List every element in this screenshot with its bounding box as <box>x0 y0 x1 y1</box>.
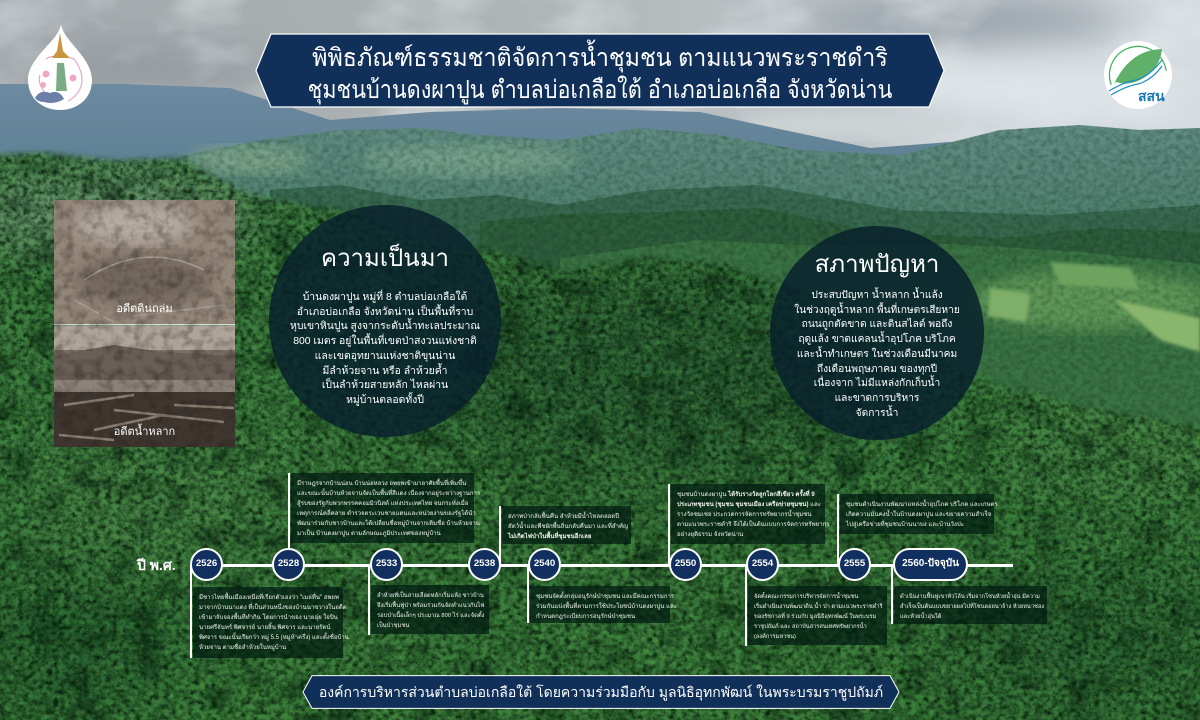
node 2540 <box>528 548 561 581</box>
node 2526: 2526 <box>196 558 217 569</box>
node pill 2560: 2560-ปัจจุบัน <box>902 558 959 569</box>
text: history body: อำเภอบ่อเกลือ จังหวัดน่าน เป็นพื้นที่ราบ <box>297 307 473 318</box>
heading: history: ความเป็นมา <box>321 245 449 272</box>
event 2560: สำเร็จเป็นต้นแบบขยายผลไปที่โซนดอยนาจ้าง ห้วยหนาช่อง <box>900 604 1044 610</box>
event 2550: อย่างยุติธรรม จังหวัดน่าน <box>677 532 743 538</box>
event 2533: รอบป่าเนื้อเล็กๆ ประมาณ 800 ไร่ และจัดตั้ง <box>377 613 484 619</box>
timeline label: ปี พ.ศ. <box>137 557 176 573</box>
timeline axis <box>190 564 1013 566</box>
panel: problems circle <box>770 226 984 440</box>
node 2533: 2533 <box>376 558 397 569</box>
event 2528 <box>288 473 480 548</box>
event 2528: มีราษฎรจากบ้านน่อน บ้านน่อหลวง อพยพเข้ามาอาศัยพื้นที่เพิ่มขึ้น <box>297 481 466 487</box>
event 2555: ชุมชนดำเนินงานพัฒนาแหล่งน้ำอุปโภค บริโภค และเกษตร <box>846 502 998 508</box>
node 2554 <box>746 548 779 581</box>
text: history body: หมู่บ้านตลอดทั้งปี <box>346 395 424 406</box>
text: history body: บ้านดงผาปูน หมู่ที่ 8 ตำบลบ่อเกลือใต้ <box>303 292 467 303</box>
text: history body <box>290 290 480 406</box>
node pill 2560 <box>893 548 968 581</box>
logo: สสน agency emblem: สสน <box>1138 88 1165 104</box>
event 2554: (องค์การมหาชน) <box>754 634 796 640</box>
event 2533: ลำห้วยที่เป็นสายเลือดหลักเริ่มแห้ง ชาวบ้าน <box>377 593 484 599</box>
text: problems body: ถนนถูกตัดขาด และดินสไลด์ พอถึง <box>802 319 952 330</box>
event 2526: มีชาวไทยพื้นเมืองเหนือที่เรียกตัวเองว่า "เมล่ทื่น" อพยพ <box>199 595 339 601</box>
node 2533 <box>370 548 403 581</box>
event 2528: เหตุการณ์คลี่คลาย ตำรวจตระเวนชายแดนและหน่วยงานของรัฐได้นำ <box>297 511 476 517</box>
logo: สสน agency emblem <box>1104 41 1172 109</box>
event 2550: ชุมชนบ้านดงผาปูน ได้รับรางวัลลูกโลกสีเขียว ครั้งที่ 9 <box>677 492 815 498</box>
event 2550: ตามแนวพระราชดำริ จึงได้เป็นต้นแบบการจัดการทรัพยากร <box>677 522 830 528</box>
footer banner <box>302 675 900 709</box>
title banner <box>255 33 944 108</box>
event 2554: จัดตั้งคณะกรรมการบริหารจัดการน้ำชุมชน <box>754 594 858 600</box>
event 2538 <box>499 506 631 564</box>
event 2528: สู้รบของรัฐกับพวกพรรคคอมมิวนิสต์ แห่งประเทศไทย จนกระทั่งเมื่อ <box>297 501 468 507</box>
caption: flash flood: อดีตน้ำหลาก <box>114 426 175 438</box>
event 2554: ของรัชกาลที่ 9 ร่วมกับ มูลนิธิอุทกพัฒน์ ในพระบรม <box>754 614 876 620</box>
event 2528: มาเป็น บ้านดงผาปูน ตามลักษณะภูมิประเทศของหมู่บ้าน <box>297 531 441 537</box>
text: problems body: จัดการน้ำ <box>856 408 898 419</box>
logo: water drop museum emblem <box>28 24 92 110</box>
event 2540: ชุมชนจัดตั้งกลุ่มอนุรักษ์ป่าชุมชน และมีคณะกรรมการ <box>536 594 674 600</box>
text: problems body: และน้ำทำเกษตร ในช่วงเดือนมีนาคม <box>797 349 957 360</box>
event 2528: พัฒนาร่วมกับชาวบ้านและได้เปลี่ยนชื่อหมู่บ้านจากเดิมชื่อ บ้านห้วยจาน <box>297 521 480 527</box>
event 2540: ร่วมกันแบ่งพื้นที่ตามการใช้ประโยชน์บ้านดงผาปูน และ <box>536 604 677 610</box>
text: problems body: ถึงเดือนพฤษภาคม ของทุกปี <box>817 364 937 375</box>
event 2555 <box>837 494 998 564</box>
event 2533 <box>368 567 489 635</box>
node 2528: 2528 <box>278 558 299 569</box>
event 2554: เริ่มดำเนินงานพัฒนาดิน น้ำ ป่า ตามแนวพระราชดำริ <box>754 604 883 610</box>
event 2560: และห้วยน้ำอุ่นใต้ <box>900 614 941 620</box>
title banner: พิพิธภัณฑ์ธรรมชาติจัดการน้ำชุมชน ตามแนวพระราชดำริ <box>312 44 888 72</box>
event 2560 <box>891 567 1047 624</box>
event 2554 <box>745 567 887 646</box>
node 2540: 2540 <box>534 558 555 569</box>
event 2526: ห้วยจาน ตามชื่อลำห้วยในหมู่บ้าน <box>199 645 286 651</box>
text: history body: และเขตอุทยานแห่งชาติขุนน่าน <box>315 351 455 362</box>
panel: history circle <box>269 205 501 437</box>
event 2526: มาจากบ้านนาแดง ที่เป็นส่วนหนึ่งของบ้านนาขวางในอดีต <box>199 605 347 611</box>
event 2555: ไปสู่เครือข่ายที่ชุมชนบ้านนาบง และบ้านวังปะ <box>846 522 964 528</box>
event 2560: ดำเนินงานฟื้นฟูเขาหัวโล้น เริ่มจากโซนห้วยน้ำอุ่น มีความ <box>900 594 1040 600</box>
event 2526 <box>190 567 349 658</box>
event 2550: รางวัลชมเชย ประกวดการจัดการทรัพยากรน้ำชุมชน <box>677 512 812 518</box>
event 2528: และขณะนั้นบ้านห้วยจานจัดเป็นพื้นที่สีแดง เนื่องจากอยู่ระหว่างฐานการ <box>297 491 480 497</box>
event 2554: ราชูปถัมภ์ และ สถาบันสารสนเทศทรัพยากรน้ำ <box>754 624 867 630</box>
title banner: ชุมชนบ้านดงผาปูน ตำบลบ่อเกลือใต้ อำเภอบ่อเกลือ จังหวัดน่าน <box>308 76 892 104</box>
node 2538: 2538 <box>474 558 495 569</box>
event 2526: นายศรีจันทร์ พิศจารย์ นายสิ้น พิศจาร และนายรัตน์ <box>199 625 330 631</box>
text: problems body: เนื่องจาก ไม่มีแหล่งกักเก็บน้ำ <box>814 378 940 389</box>
event 2533: จึงเริ่มฟื้นฟูป่า พร้อมร่วมกันจัดทำแนวกันไฟ <box>377 603 484 609</box>
event 2540 <box>527 567 677 623</box>
text: problems body: ฤดูแล้ง ขาดแคลนน้ำอุปโภค บริโภค <box>798 334 956 345</box>
caption: landslide: อดีตดินถล่ม <box>116 303 173 315</box>
event 2533: เป็นป่าชุมชน <box>377 623 409 629</box>
event 2540: กำหนดกฎระเบียบการอนุรักษ์ป่าชุมชน <box>536 614 635 620</box>
footer banner: องค์การบริหารส่วนตำบลบ่อเกลือใต้ โดยความร่วมมือกับ มูลนิธิอุทกพัฒน์ ในพระบรมราชูปถัมภ์ <box>319 684 883 700</box>
event 2555: เกิดความมั่นคงน้ำในบ้านดงผาปูน และขยายความสำเร็จ <box>846 512 991 518</box>
node 2538 <box>468 548 501 581</box>
node 2526 <box>190 548 223 581</box>
text: history body: มีลำห้วยจาน หรือ ลำห้วยค้ำ <box>322 366 448 377</box>
event 2538: สภาพป่ากลับฟื้นคืน ลำห้วยมีน้ำไหลตลอดปี <box>508 514 619 520</box>
heading: problems: สภาพปัญหา <box>815 251 939 278</box>
photo panel: past disasters <box>54 200 235 447</box>
text: history body: เป็นลำห้วยสายหลัก ไหลผ่าน <box>322 380 448 391</box>
node 2528 <box>272 548 305 581</box>
event 2550: ประเภทชุมชน (ชุมชน ชุมชนเมือง เครือข่ายชุมชน) และ <box>677 502 821 508</box>
event 2538: สัตว์น้ำและพืชผักพื้นถิ่นกลับคืนมา และที่สำคัญ <box>508 524 628 530</box>
text: problems body: ประสบปัญหา น้ำหลาก น้ำแล้ง <box>811 290 943 301</box>
node 2555: 2555 <box>844 558 865 569</box>
text: problems body <box>794 287 960 419</box>
event 2550 <box>668 484 830 564</box>
node 2555 <box>838 548 871 581</box>
event 2538: ไม่เกิดไฟป่าในพื้นที่ชุมชนอีกเลย <box>508 534 591 540</box>
text: problems body: และขาดการบริหาร <box>835 393 919 404</box>
node 2550 <box>669 548 702 581</box>
text: history body: หุบเขาหินปูน สูงจากระดับน้ำทะเลประมาณ <box>290 321 480 332</box>
text: history body: 800 เมตร อยู่ในพื้นที่เขตป่าสงวนแห่งชาติ <box>293 336 477 347</box>
node 2554: 2554 <box>752 558 773 569</box>
text: problems body: ในช่วงฤดูน้ำหลาก พื้นที่เกษตรเสียหาย <box>794 305 960 316</box>
event 2526: เข้ามาจับจองพื้นที่ทำกิน โดยการนำของ นายอุ่ย ใจปิน <box>199 615 338 621</box>
event 2526: พิศจาร ขณะนั้นเรียกว่า หมู่ 5.5 (หมู่ห้าครึ่ง) และตั้งชื่อบ้าน <box>199 635 349 641</box>
node 2550: 2550 <box>675 558 696 569</box>
